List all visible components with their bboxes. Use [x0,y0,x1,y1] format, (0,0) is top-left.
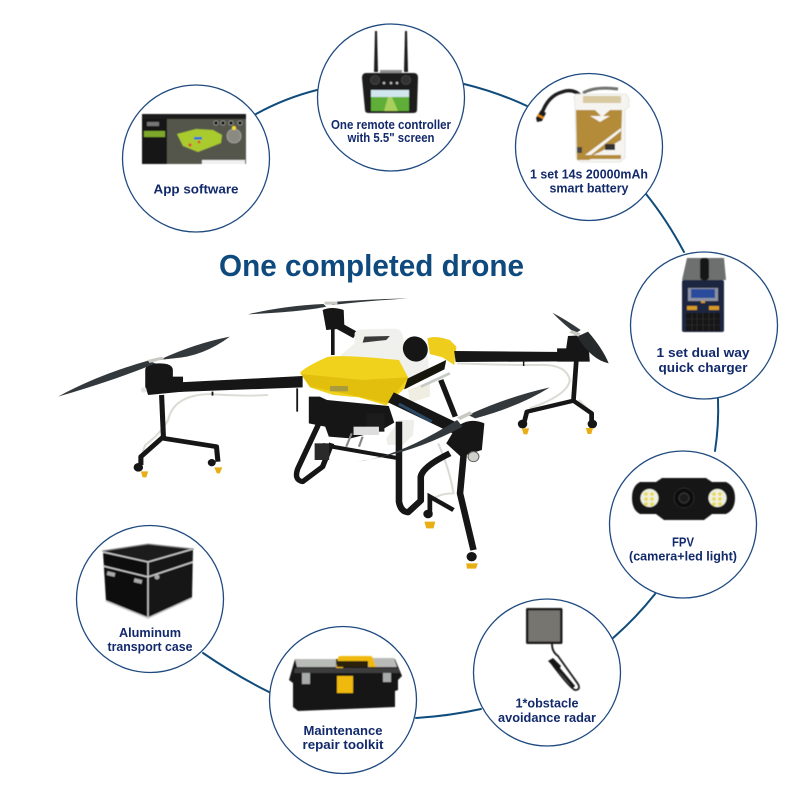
icon: aluminum case [102,544,194,618]
label: repair toolkit [302,738,384,752]
label [498,696,596,725]
hoses [143,363,592,500]
right leg [524,360,592,422]
front leg [460,447,473,550]
label: Maintenance [304,724,383,738]
rear yellow shell [427,337,456,365]
label: FPV [672,536,695,550]
panel: transport case [76,526,224,672]
connector: app to remote [256,90,317,114]
panel: quick charger [630,252,778,399]
connector: charger to FPV [715,399,718,451]
icon: radar [526,608,579,690]
left arm [174,376,303,392]
label: 1 set 14s 20000mAh [530,168,648,182]
under body pump [386,420,414,445]
label: with 5.5" screen [347,131,434,145]
label: smart battery [550,182,629,196]
connector: battery to charger [646,194,684,252]
drone [58,298,609,569]
panel: toolkit [270,626,416,774]
rear arm [328,320,355,335]
label: transport case [108,640,193,654]
propellers [58,298,609,462]
icon: battery [536,88,629,162]
connector: FPV to radar [613,594,655,638]
label: (camera+led light) [629,550,737,564]
connector: toolkit to case [203,653,269,692]
icon: toolbox [289,656,402,711]
front arm [391,397,459,430]
label: 1 set dual way [656,346,750,360]
label [656,346,750,375]
rear landing gear [296,380,455,482]
connector: radar to toolkit [416,709,481,718]
front strut [399,422,450,512]
label [530,168,648,196]
label [302,724,384,752]
label: App software [154,182,238,196]
panel: remote controller [318,24,464,171]
label: 1*obstacle [516,696,579,710]
panel: app software [122,85,270,232]
icon: app screenshot [142,114,246,164]
tank [341,329,429,378]
label [629,536,737,564]
icon: charger [682,258,726,332]
label [108,626,193,654]
motors [145,363,183,395]
right arm [454,351,566,362]
label: Aluminum [119,626,181,640]
panel: battery [516,74,662,220]
yellow shell [300,356,408,405]
icon: FPV camera [632,478,735,520]
nozzles [134,420,597,561]
label: One remote controller [331,118,451,132]
label: quick charger [658,361,748,375]
connector: remote to battery [464,84,527,106]
panel: radar [474,599,620,746]
left leg [141,395,218,465]
icon: remote controller [362,31,418,113]
label: avoidance radar [498,711,596,725]
label [331,118,451,145]
panel: FPV [610,451,756,598]
frame [404,360,446,389]
title: One completed drone [219,248,524,283]
